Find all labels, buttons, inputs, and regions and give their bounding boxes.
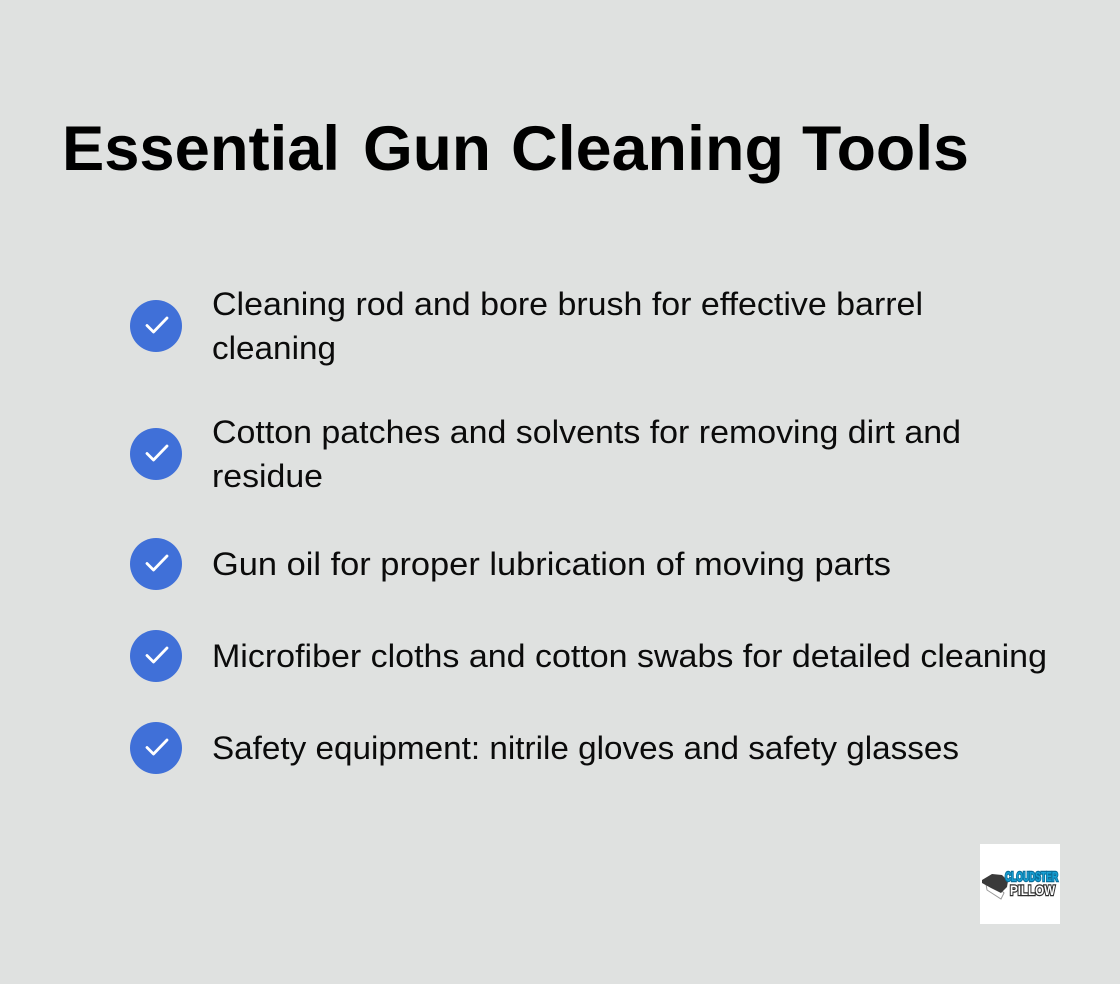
icon: check 5: [130, 722, 182, 774]
item 1 text: cleaning: [212, 330, 336, 366]
item 5: [130, 722, 959, 774]
item 3 text: Gun oil for proper lubrication of moving parts: [212, 546, 891, 582]
item 4 text: Microfiber cloths and cotton swabs for detailed cleaning: [212, 638, 1047, 674]
item 2: [130, 414, 961, 494]
icon: pillow: [982, 874, 1008, 899]
item 5 text: Safety equipment: nitrile gloves and safety glasses: [212, 730, 959, 766]
item 1 text: Cleaning rod and bore brush for effective barrel: [212, 286, 923, 322]
item 3: [130, 538, 891, 590]
icon: check 3: [130, 538, 182, 590]
icon: check 2: [130, 428, 182, 480]
item 2 text: Cotton patches and solvents for removing dirt and: [212, 414, 961, 450]
title: Essential: [62, 114, 340, 184]
logo wordmark: [1005, 869, 1058, 898]
item 2 text: residue: [212, 458, 323, 494]
title: Tools: [802, 114, 969, 184]
title: Cleaning: [511, 114, 784, 184]
icon: check 4: [130, 630, 182, 682]
title: Gun: [363, 114, 491, 184]
checklist: [130, 286, 1047, 774]
icon: check 1: [130, 300, 182, 352]
logo: [980, 844, 1060, 924]
item 4: [130, 630, 1047, 682]
logo wordmark: PILLOW: [1010, 882, 1056, 898]
item 1: [130, 286, 923, 366]
logo wordmark: CLOUDSTER: [1005, 869, 1058, 884]
